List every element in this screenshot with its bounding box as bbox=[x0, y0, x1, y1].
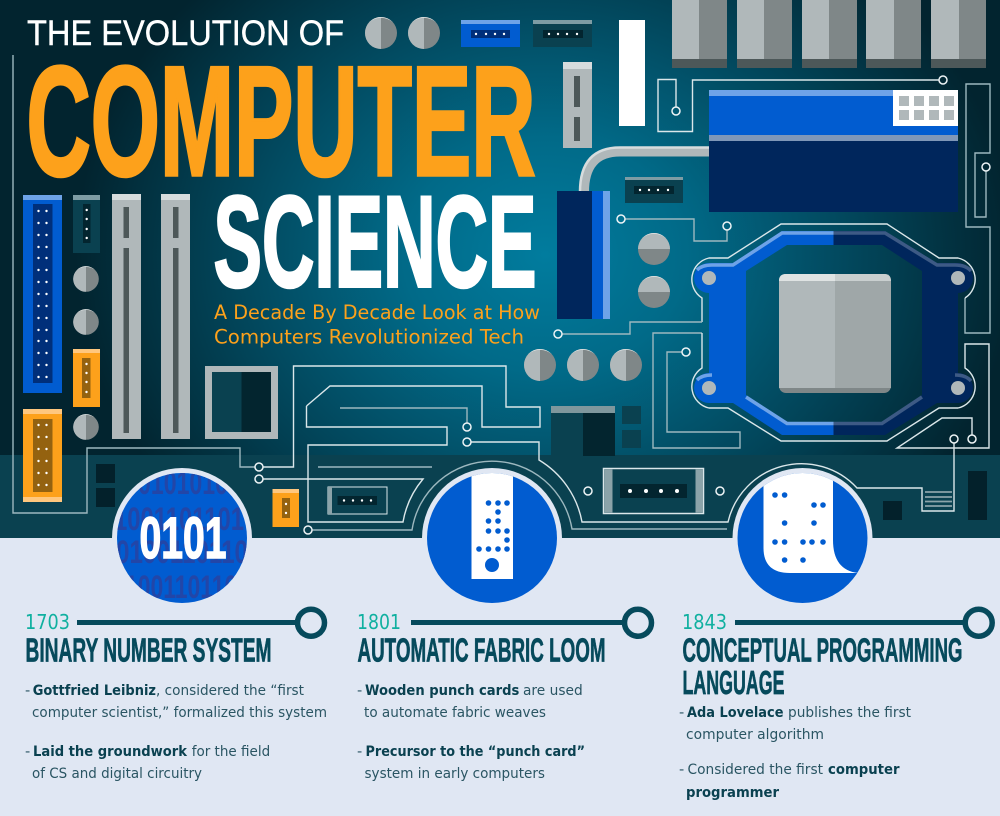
bullet text 2: system in early computers bbox=[364, 766, 545, 782]
expansion slot 2 bbox=[161, 194, 190, 439]
bullet text 2: Precursor to the “punch card” bbox=[366, 744, 585, 760]
heading: binary number system: BINARY NUMBER SYSTEM bbox=[26, 632, 272, 668]
bullet text 2: are used bbox=[523, 683, 583, 699]
timeline marker 2 bbox=[411, 609, 652, 636]
bullet text 3: - bbox=[679, 762, 684, 778]
connector: orange tiny bbox=[272, 489, 299, 527]
cpu bracket bbox=[694, 231, 973, 435]
subtitle: A Decade By Decade Look at How bbox=[214, 301, 540, 324]
expansion slot 1 bbox=[112, 194, 141, 439]
bullet text 3: - bbox=[679, 705, 684, 721]
bullet text 2: Wooden punch cards bbox=[365, 683, 519, 699]
panel: 1843 conceptual programming language bbox=[679, 609, 992, 801]
dark chips bbox=[96, 464, 987, 520]
title: science: SCIENCE bbox=[214, 168, 536, 314]
connector: large blue bbox=[23, 195, 62, 393]
year: 1703: 1703 bbox=[25, 610, 70, 634]
bullet text 1: computer scientist,” formalized this system bbox=[32, 705, 327, 721]
bullet text 1 bbox=[25, 683, 327, 782]
circuit traces bbox=[13, 55, 990, 530]
cpu chip bbox=[779, 274, 891, 393]
capacitors: top bbox=[365, 17, 440, 49]
square socket bbox=[205, 366, 278, 439]
capacitors: row bbox=[524, 349, 642, 381]
memory blocks bbox=[672, 0, 986, 68]
connector: teal vertical bbox=[73, 195, 100, 253]
trace end pads bbox=[255, 76, 990, 534]
bullet text 1: Laid the groundwork bbox=[33, 744, 187, 760]
bullet text 1: - bbox=[25, 683, 30, 699]
connector: blue top bbox=[461, 20, 520, 47]
badge: binary digits bbox=[112, 465, 252, 608]
heat pipe bbox=[580, 148, 709, 192]
badge: binary digits: 1001101101 bbox=[114, 501, 244, 537]
connector: teal top bbox=[533, 20, 592, 47]
badge: binary digits: 0100110110 bbox=[116, 534, 248, 570]
panel: 1801 automatic fabric loom bbox=[357, 609, 652, 782]
bullet text 3: Ada Lovelace bbox=[687, 705, 784, 721]
connector: small orange bbox=[73, 349, 100, 407]
bullet text 3: computer bbox=[828, 762, 900, 778]
timeline marker 3 bbox=[735, 609, 992, 636]
slot: grey short connector bbox=[563, 62, 592, 148]
panel: 1703 binary number system bbox=[25, 609, 327, 782]
badge: binary digits: 1001101100 bbox=[125, 569, 250, 605]
connector: outlined small bbox=[328, 487, 387, 514]
badge: binary digits: 0101010 bbox=[138, 465, 228, 501]
heading: automatic fabric loom: AUTOMATIC FABRIC LOOM bbox=[358, 632, 606, 668]
heatsink block bbox=[709, 90, 958, 212]
bullet text 3 bbox=[679, 705, 911, 801]
title: the evolution of: THE EVOLUTION OF bbox=[27, 13, 344, 53]
title: computer: COMPUTER bbox=[26, 35, 536, 209]
white module bbox=[619, 20, 645, 126]
subtitle bbox=[214, 301, 540, 348]
heading: conceptual programming language bbox=[682, 632, 962, 701]
timeline marker 1 bbox=[77, 609, 324, 636]
bullet text 1: of CS and digital circuitry bbox=[32, 766, 202, 782]
bullet text 2: - bbox=[357, 683, 362, 699]
year: 1801: 1801 bbox=[357, 610, 401, 634]
bullet text 2: - bbox=[357, 744, 362, 760]
bullet text 1: for the field bbox=[192, 744, 270, 760]
bullet text 3: programmer bbox=[686, 785, 780, 801]
year: 1843: 1843 bbox=[682, 610, 727, 634]
bullet text 3: Considered the first bbox=[688, 762, 823, 778]
capacitors: left column bbox=[73, 266, 99, 440]
badge: program scroll bbox=[732, 468, 872, 608]
bullet text 2: to automate fabric weaves bbox=[364, 705, 546, 721]
bullet text 3: publishes the first bbox=[788, 705, 911, 721]
connector: large orange bbox=[23, 409, 62, 502]
capacitors: horizontal split bbox=[638, 233, 670, 308]
connector: teal middle bbox=[625, 177, 683, 203]
heading: conceptual programming language: LANGUAGE bbox=[682, 664, 784, 701]
bullet text 1: Gottfried Leibniz bbox=[33, 683, 156, 699]
dark block with squares bbox=[551, 406, 641, 456]
grille bbox=[925, 492, 952, 506]
bullet text 1: , considered the “first bbox=[156, 683, 304, 699]
badge: punch card bbox=[422, 468, 562, 608]
vertical navy module bbox=[557, 191, 610, 319]
bullet text 3: computer algorithm bbox=[686, 727, 824, 743]
connector: outlined large bbox=[604, 468, 704, 514]
bullet text 1: - bbox=[25, 744, 30, 760]
badge: binary digits: 0101 bbox=[140, 506, 226, 571]
subtitle: Computers Revolutionized Tech bbox=[214, 326, 524, 348]
bullet text 2 bbox=[357, 683, 585, 782]
